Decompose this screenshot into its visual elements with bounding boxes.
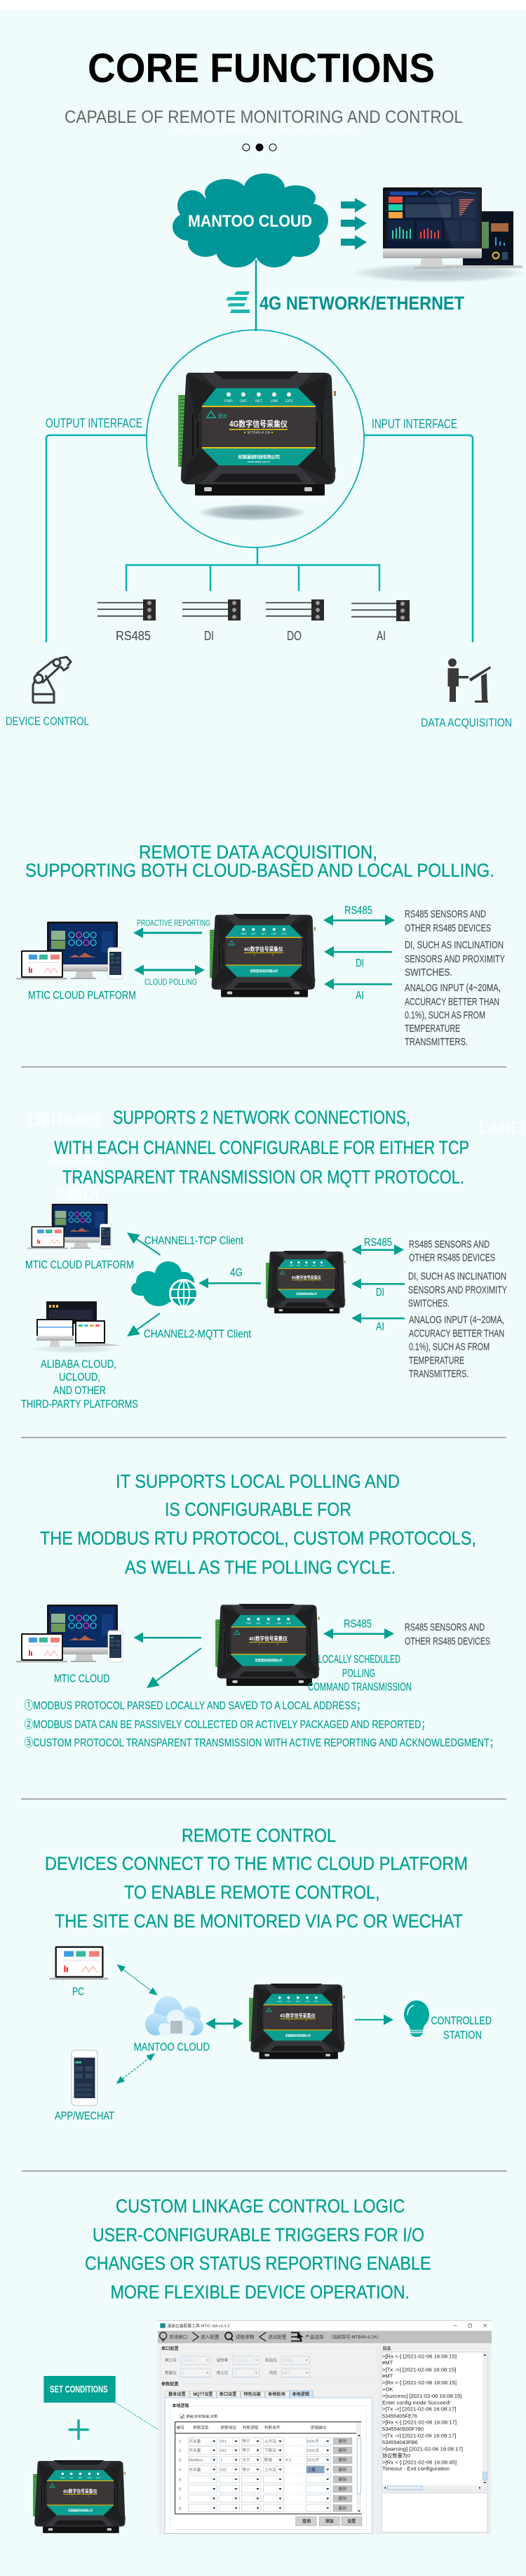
device: LINK xyxy=(87,2476,92,2479)
icon: light bulb xyxy=(404,2000,429,2037)
arrow: to list xyxy=(147,1648,201,1688)
arrow: cloud polling xyxy=(134,964,205,976)
icon: plus xyxy=(69,2419,89,2440)
heading xyxy=(40,1471,476,1578)
screenshot: configuration tool: 停止位 xyxy=(217,2370,229,2376)
screenshot: configuration tool: MQTT设置 xyxy=(193,2391,213,2397)
screenshot: configuration tool: 数据位 xyxy=(165,2370,177,2376)
screenshot: configuration tool: 编号 xyxy=(177,2424,184,2430)
device: PWR xyxy=(246,1622,252,1625)
icon: cloud with globe xyxy=(131,1261,198,1308)
screenshot: configuration tool: 设置 xyxy=(347,2518,356,2524)
device: DAT xyxy=(297,1265,301,1267)
label: DI: DI xyxy=(356,957,364,969)
cloud: Mantoo Cloud: MANTOO CLOUD xyxy=(188,212,312,231)
heading: SUPPORTS 2 NETWORK CONNECTIONS, xyxy=(113,1107,410,1128)
ghost labels behind second heading xyxy=(26,1113,526,1202)
label: AI: AI xyxy=(377,629,386,643)
device: hero: www.mantoo.com.cn xyxy=(248,460,270,463)
label: RS485: RS485 xyxy=(116,629,151,643)
text: feature list: ①MODBUS PROTOCOL PARSED LOCALLY AND SAVED TO A LOCAL ADDRESS； xyxy=(24,1699,365,1712)
screenshot: configuration tool: 1 xyxy=(220,2459,222,2463)
device xyxy=(215,1604,320,1686)
device: 无锡漫途科技有限公司 xyxy=(296,1292,317,1295)
cloud: Mantoo Cloud xyxy=(173,173,328,267)
connector line: cloud to device xyxy=(255,260,257,331)
screenshot: configuration tool: 读取参数 xyxy=(236,2334,255,2340)
label: DO: DO xyxy=(287,629,302,643)
screenshot: configuration tool: 日志 xyxy=(383,2346,391,2351)
screenshot: configuration tool: 退出配置 xyxy=(268,2334,286,2340)
ghost labels behind second heading: LAN口 xyxy=(479,1120,526,1136)
screenshot: configuration tool: Enter config mode Succeed! xyxy=(382,2399,450,2405)
device: hero: PWR xyxy=(224,399,233,404)
output interface label: OUTPUT INTERFACE xyxy=(46,416,142,430)
label: channel 2: CHANNEL2-MQTT Client xyxy=(144,1329,251,1341)
heading: REMOTE CONTROL xyxy=(182,1825,336,1846)
device: hero: LINK xyxy=(270,399,278,404)
heading xyxy=(25,842,494,881)
label: PC: PC xyxy=(72,1986,84,1998)
screenshot: configuration tool: 1 xyxy=(179,2440,181,2444)
screenshot: configuration tool: 下降沿 xyxy=(264,2448,276,2453)
panel: two network connections xyxy=(21,1107,507,1411)
input line xyxy=(363,435,473,642)
screenshot: configuration tool: 6 xyxy=(179,2488,181,2492)
arrow: AI xyxy=(351,1313,405,1324)
text: RS485 devices: RS485 SENSORS AND xyxy=(405,1622,485,1633)
panel: local polling xyxy=(16,1471,498,1749)
screenshot: configuration tool: 8 xyxy=(179,2507,181,2511)
screenshot: configuration tool: 校验位 xyxy=(265,2358,277,2363)
device: GPS xyxy=(314,2000,318,2003)
screenshot: configuration tool: NONE xyxy=(283,2359,294,2363)
device xyxy=(249,1984,345,2059)
screenshot: configuration tool: 等于 xyxy=(242,2448,250,2453)
screenshot: configuration tool: DI1 xyxy=(220,2440,227,2444)
screenshot: configuration tool: 删除 xyxy=(339,2467,346,2472)
pagination dots xyxy=(243,143,276,152)
screenshot: configuration tool: 删除 xyxy=(339,2505,346,2511)
screenshot: configuration tool: 串口设置 xyxy=(220,2391,236,2397)
input interface label: INPUT INTERFACE xyxy=(372,416,457,431)
screenshot: configuration tool: 0.2 xyxy=(285,2459,291,2463)
heading xyxy=(85,2196,431,2302)
device: PWR xyxy=(60,2476,65,2479)
screenshot: configuration tool: +OK xyxy=(382,2386,393,2392)
screenshot: configuration tool: >[Tx ->] [2021-02-06 16:08:17] xyxy=(382,2406,456,2412)
screenshot: configuration tool: 流控 xyxy=(269,2370,277,2376)
ghost text behind subtitle: 安防空间安全预警监测仪 xyxy=(173,119,355,135)
dashed leader line xyxy=(116,2403,173,2439)
arrow: phone to cloud xyxy=(116,2053,155,2084)
screenshot: configuration tool: #MT xyxy=(382,2373,393,2379)
device: NET xyxy=(296,2000,300,2003)
screenshot: configuration tool: 115200 xyxy=(234,2359,247,2363)
label: MTIC cloud: MTIC CLOUD xyxy=(54,1673,109,1685)
callout: set conditions: SET CONDITIONS xyxy=(50,2384,108,2394)
text: RS485 devices: OTHER RS485 DEVICES xyxy=(405,1636,490,1647)
monitor and laptop dashboard xyxy=(351,187,526,283)
panel: remote control xyxy=(45,1825,492,2123)
text: polling command: POLLING xyxy=(342,1668,375,1680)
arrow: RS485 xyxy=(323,915,395,926)
device: GPS xyxy=(281,932,287,935)
device: 无锡漫途科技有限公司 xyxy=(68,2509,93,2512)
text: interface descriptions: TEMPERATURE xyxy=(409,1355,464,1367)
heading: IS CONFIGURABLE FOR xyxy=(165,1499,351,1520)
text: polling command: COMMAND TRANSMISSION xyxy=(308,1682,412,1694)
device: LINK xyxy=(276,1622,282,1625)
screenshot: configuration tool: 波特率 xyxy=(217,2358,229,2363)
screenshot: configuration tool: 查询 xyxy=(302,2518,311,2524)
device: PWR xyxy=(277,2000,283,2003)
screenshot: configuration tool: 3 xyxy=(179,2459,181,2463)
arrow: DI xyxy=(324,946,392,957)
icon: robot arm xyxy=(33,657,71,703)
screenshot: configuration tool: 等于 xyxy=(242,2438,250,2444)
text: feature list: ②MODBUS DATA CAN BE PASSIVELY COLLECTED OR ACTIVELY PACKAGED AND REPORTED； xyxy=(24,1718,430,1731)
screenshot: configuration tool: 大于 xyxy=(242,2457,250,2463)
label: data acquisition: DATA ACQUISITION xyxy=(421,717,512,729)
screenshot: configuration tool: 判断逻辑 xyxy=(243,2424,259,2430)
screenshot: configuration tool: 协议数量为0 xyxy=(382,2452,410,2459)
label: RS485: RS485 xyxy=(364,1237,392,1249)
screenshot: configuration tool: NFC xyxy=(283,2372,290,2376)
connector: AI xyxy=(351,600,410,621)
label: 4G: 4G xyxy=(230,1267,243,1279)
text: interface descriptions: SWITCHES. xyxy=(408,1299,450,1310)
screenshot: configuration tool: 开关量 xyxy=(189,2467,201,2472)
device: PWR xyxy=(289,1265,293,1267)
heading: TO ENABLE REMOTE CONTROL, xyxy=(124,1882,380,1903)
text: interface descriptions: TEMPERATURE xyxy=(405,1023,460,1035)
label: MTIC cloud platform: MTIC CLOUD PLATFORM xyxy=(28,990,136,1002)
screenshot: configuration tool: 删除 xyxy=(339,2496,346,2502)
text: polling command xyxy=(308,1654,412,1694)
screenshot: configuration tool: 判断条件 xyxy=(264,2424,281,2430)
screenshot: configuration tool: 本地逻辑 xyxy=(172,2403,189,2409)
text: RS485 devices xyxy=(405,1622,490,1647)
screenshot: configuration tool: DI2 xyxy=(220,2468,227,2472)
label: device control: DEVICE CONTROL xyxy=(6,715,89,728)
screenshot: configuration tool: 使能本地智能决策 xyxy=(186,2414,218,2419)
device: DAT xyxy=(69,2476,74,2479)
screenshot: configuration tool: 53455405FE76 xyxy=(382,2412,417,2419)
text: polling command: LOCALLY SCHEDULED xyxy=(318,1654,400,1666)
screenshot: configuration tool: 8 xyxy=(182,2372,184,2376)
text: interface descriptions: TRANSMITTERS. xyxy=(409,1369,468,1380)
device: NET xyxy=(304,1265,309,1267)
heading: REMOTE DATA ACQUISITION, xyxy=(139,842,377,863)
device: DAT xyxy=(251,932,256,935)
device: hero: 漫途 xyxy=(217,413,227,419)
icon: person at lectern xyxy=(447,658,491,703)
screenshot: configuration tool: 5345540500F780 xyxy=(382,2426,424,2432)
screenshot: configuration tool: 漫途云盒配置工具 MTIC-SA v3.4.2 xyxy=(167,2323,229,2328)
label: DI: DI xyxy=(376,1287,384,1299)
label: controlled station xyxy=(431,2015,492,2041)
screenshot: configuration tool: 基本设置 xyxy=(168,2391,186,2397)
label: controlled station: CONTROLLED xyxy=(431,2015,492,2027)
arrow: channel 1 xyxy=(127,1233,160,1255)
text: interface descriptions: RS485 SENSORS AND xyxy=(405,909,486,920)
device: GPS xyxy=(320,1265,324,1267)
screenshot: configuration tool: 开关量 xyxy=(189,2448,201,2453)
screenshot: configuration tool: >[warning] [2021-02-06 16:08:17] xyxy=(382,2445,463,2452)
screenshot: configuration tool: 上报 xyxy=(307,2467,316,2472)
screenshot: configuration tool: 特色功能 xyxy=(243,2391,261,2397)
icon: cloud platform devices xyxy=(16,1605,123,1662)
device: LINK xyxy=(312,1265,316,1267)
screenshot: configuration tool xyxy=(158,2321,492,2542)
label: RS485: RS485 xyxy=(344,1619,372,1631)
label: controlled station: STATION xyxy=(443,2030,482,2041)
screenshot: configuration tool: DO1开 xyxy=(307,2439,319,2444)
text: third-party platforms: ALIBABA CLOUD, xyxy=(41,1359,116,1370)
icon: cloud platform devices xyxy=(27,1204,112,1249)
device: NET xyxy=(267,1622,271,1625)
screenshot: configuration tool: 关闭串口 xyxy=(169,2334,187,2340)
device: hero: 无锡漫途科技有限公司 xyxy=(238,453,280,460)
device: hero xyxy=(178,371,336,496)
screenshot: configuration tool: 参数类型 xyxy=(193,2424,209,2430)
callout: set conditions xyxy=(43,2376,116,2403)
text: interface descriptions: 0.1%), SUCH AS FROM xyxy=(405,1010,485,1021)
heading: IT SUPPORTS LOCAL POLLING AND xyxy=(116,1471,400,1492)
screenshot: configuration tool: 删除 xyxy=(339,2457,346,2463)
connector: RS485 xyxy=(97,599,156,620)
screenshot: configuration tool: >[success] [2021-02-06 16:08:15] xyxy=(382,2393,461,2399)
heading: CUSTOM LINKAGE CONTROL LOGIC xyxy=(116,2196,405,2217)
screenshot: configuration tool: 逻辑输出 xyxy=(311,2424,327,2430)
arrows: cloud to dashboard xyxy=(341,198,367,250)
device: 4G数字信号采集仪 xyxy=(292,1275,321,1280)
screenshot: configuration tool: 4 xyxy=(179,2468,181,2472)
screenshot: configuration tool: 删除 xyxy=(339,2486,346,2492)
text: interface descriptions: OTHER RS485 DEVICES xyxy=(405,923,491,934)
device: hero: NET xyxy=(255,399,262,404)
text: interface descriptions xyxy=(408,1240,507,1380)
device: NET xyxy=(262,932,266,935)
screenshot: configuration tool: 1 xyxy=(234,2372,236,2376)
screenshot: configuration tool: 产品选型 xyxy=(305,2334,324,2340)
screenshot: configuration tool: 5 xyxy=(179,2478,181,2482)
device: NET xyxy=(79,2476,83,2479)
heading: DEVICES CONNECT TO THE MTIC CLOUD PLATFORM xyxy=(45,1853,468,1874)
interface tree lines xyxy=(126,547,379,591)
device: 4G数字信号采集仪 xyxy=(63,2488,97,2494)
icon: laptop xyxy=(49,1946,108,1979)
screenshot: configuration tool: 本地逻辑 xyxy=(292,2391,309,2397)
heading: AS WELL AS THE POLLING CYCLE. xyxy=(125,1557,396,1578)
device: 无锡漫途科技有限公司 xyxy=(255,1658,283,1663)
ghost labels behind second heading: 2路DI xyxy=(56,1186,100,1202)
screenshot: configuration tool: 534554043FB6 xyxy=(382,2439,418,2445)
device: LINK xyxy=(305,2000,310,2003)
screenshot: configuration tool: >[Rx <-] [2021-02-06 16:08:15] xyxy=(382,2379,457,2386)
screenshot: configuration tool: >[Rx <-] [2021-02-06 16:08:17] xyxy=(382,2419,457,2426)
icon: phone xyxy=(72,2050,97,2106)
label: Mantoo cloud: MANTOO CLOUD xyxy=(134,2041,210,2053)
arrow: cloud to device xyxy=(205,2018,243,2029)
label: cloud polling: CLOUD POLLING xyxy=(144,977,197,987)
text: interface descriptions: RS485 SENSORS AND xyxy=(409,1240,490,1251)
screenshot: configuration tool: DO1开 xyxy=(307,2458,319,2463)
heading: USER-CONFIGURABLE TRIGGERS FOR I/O xyxy=(93,2224,424,2245)
heading: CHANGES OR STATUS REPORTING ENABLE xyxy=(85,2253,431,2274)
arrow: 4G xyxy=(198,1277,261,1289)
output line xyxy=(46,435,147,642)
panel: remote data acquisition xyxy=(16,842,505,1048)
screenshot: configuration tool: 上升沿 xyxy=(264,2438,276,2444)
device: 无锡漫途科技有限公司 xyxy=(250,969,278,974)
screenshot: configuration tool: 删除 xyxy=(339,2448,346,2453)
icon: blue cloud xyxy=(145,1996,203,2036)
screenshot: configuration tool: 等于 xyxy=(242,2467,250,2472)
ghost labels behind second heading: 2路DO xyxy=(50,1149,101,1165)
heading: THE SITE CAN BE MONITORED VIA PC OR WECHAT xyxy=(55,1911,463,1932)
label: proactive reporting: PROACTIVE REPORTING xyxy=(137,918,210,928)
device: 无锡漫途科技有限公司 xyxy=(285,2033,311,2037)
connector: DO xyxy=(266,599,324,620)
label: MTIC cloud platform: MTIC CLOUD PLATFORM xyxy=(25,1259,134,1271)
arrow: AI xyxy=(324,978,392,990)
screenshot: configuration tool: 本地轮询 xyxy=(268,2391,285,2397)
icon: network stack xyxy=(226,291,250,313)
subtitle: CAPABLE OF REMOTE MONITORING AND CONTROL xyxy=(65,107,463,127)
screenshot: configuration tool: #MT xyxy=(382,2360,393,2366)
screenshot: configuration tool: Timeout - Exit configuration xyxy=(382,2466,450,2472)
screenshot: configuration tool: >[Rx <-] [2021-02-06 16:08:45] xyxy=(382,2459,457,2465)
device xyxy=(33,2460,126,2533)
screenshot: configuration tool: 串口号 xyxy=(165,2358,177,2363)
circle around device xyxy=(147,330,364,547)
text: interface descriptions: ANALOG INPUT (4~20MA, xyxy=(405,983,501,994)
arrow: RS485 xyxy=(351,1244,404,1255)
screenshot: configuration tool: 进入配置 xyxy=(201,2335,220,2340)
heading xyxy=(54,1107,469,1188)
screenshot: configuration tool: >[Tx ->] [2021-02-06 16:08:17] xyxy=(382,2433,456,2439)
screenshot: configuration tool: >[Rx <-] [2021-02-06 16:08:15] xyxy=(382,2353,457,2359)
screenshot: configuration tool: 删除 xyxy=(339,2476,346,2482)
text: interface descriptions: SWITCHES. xyxy=(405,967,452,978)
icon: third-party platform devices xyxy=(30,1301,122,1353)
arrow: DI xyxy=(351,1279,405,1289)
screenshot: configuration tool: 参数配置 xyxy=(161,2381,179,2386)
arrow: to cloud xyxy=(133,1633,201,1642)
device: 4G数字信号采集仪 xyxy=(244,945,283,952)
screenshot: configuration tool: 删除 xyxy=(339,2438,346,2444)
panel: custom linkage control xyxy=(33,2196,492,2542)
device: DAT xyxy=(287,2000,291,2003)
device: PWR xyxy=(241,932,247,935)
device shadow xyxy=(198,504,307,521)
screenshot: configuration tool: Modbus... xyxy=(189,2459,207,2463)
device xyxy=(266,1251,345,1313)
screenshot: configuration tool: 参数地址 xyxy=(220,2424,236,2430)
screenshot: configuration tool: DI1 xyxy=(220,2449,227,2453)
device xyxy=(210,914,316,997)
text: third-party platforms xyxy=(21,1359,138,1411)
label: AI: AI xyxy=(356,990,364,1002)
text: interface descriptions: 0.1%), SUCH AS FROM xyxy=(409,1342,490,1353)
device: 4G数字信号采集仪 xyxy=(280,2012,316,2019)
screenshot: configuration tool: >[Tx ->] [2021-02-06 16:08:15] xyxy=(382,2366,456,2372)
label: AI: AI xyxy=(376,1321,384,1333)
device: DAT xyxy=(256,1622,261,1625)
arrow: device to station xyxy=(355,2014,393,2025)
text: third-party platforms: THIRD-PARTY PLATFORMS xyxy=(21,1398,138,1411)
label: DI: DI xyxy=(204,629,214,643)
ghost labels behind second heading: 1路RS485 xyxy=(26,1113,100,1129)
arrow: RS485 xyxy=(323,1628,394,1639)
connector: DI xyxy=(182,599,241,620)
text: third-party platforms: AND OTHER xyxy=(53,1385,106,1397)
screenshot: configuration tool: 添加 xyxy=(325,2518,334,2524)
arrow: proactive reporting xyxy=(133,928,202,938)
device: hero: 4G数字信号采集仪 xyxy=(229,419,288,429)
device: hero: GPS xyxy=(285,399,293,404)
arrow: channel 2 xyxy=(127,1313,160,1336)
text: interface descriptions: TRANSMITTERS. xyxy=(405,1037,468,1048)
text: interface descriptions xyxy=(405,909,505,1048)
screenshot: configuration tool: COM3 xyxy=(182,2359,194,2363)
screenshot: configuration tool: DO1关 xyxy=(307,2448,319,2453)
text: third-party platforms: UCLOUD, xyxy=(59,1372,100,1383)
screenshot: configuration tool: （当前型号:MTB46-4-2A） xyxy=(328,2334,381,2340)
text: interface descriptions: OTHER RS485 DEVICES xyxy=(409,1253,495,1264)
screenshot: configuration tool: 开关量 xyxy=(189,2438,201,2444)
device: LINK xyxy=(271,932,277,935)
screenshot: configuration tool: 7 xyxy=(179,2497,181,2502)
icon: cloud platform devices xyxy=(16,922,123,980)
device: 4G数字信号采集仪 xyxy=(249,1635,288,1642)
label: RS485: RS485 xyxy=(344,905,372,917)
device: hero: MT846-4-2A xyxy=(248,431,271,435)
screenshot: configuration tool: 2 xyxy=(179,2449,181,2453)
device: hero: DAT xyxy=(240,399,247,404)
network label: 4G NETWORK/ETHERNET xyxy=(259,293,464,314)
label: app / wechat: APP/WECHAT xyxy=(55,2111,114,2123)
heading: MORE FLEXIBLE DEVICE OPERATION. xyxy=(111,2281,410,2302)
screenshot: configuration tool: 上升沿 xyxy=(264,2467,276,2472)
arrow: PC to cloud xyxy=(117,1965,158,1996)
heading xyxy=(45,1825,468,1932)
label: channel 1: CHANNEL1-TCP Client xyxy=(144,1235,243,1247)
screenshot: configuration tool: 串口配置 xyxy=(161,2346,179,2351)
device: GPS xyxy=(286,1622,292,1625)
white top strip xyxy=(0,0,526,10)
text: feature list xyxy=(24,1699,498,1749)
screenshot: configuration tool: 数值 xyxy=(264,2457,272,2463)
device: GPS xyxy=(96,2476,100,2479)
title: CORE FUNCTIONS xyxy=(88,46,435,91)
